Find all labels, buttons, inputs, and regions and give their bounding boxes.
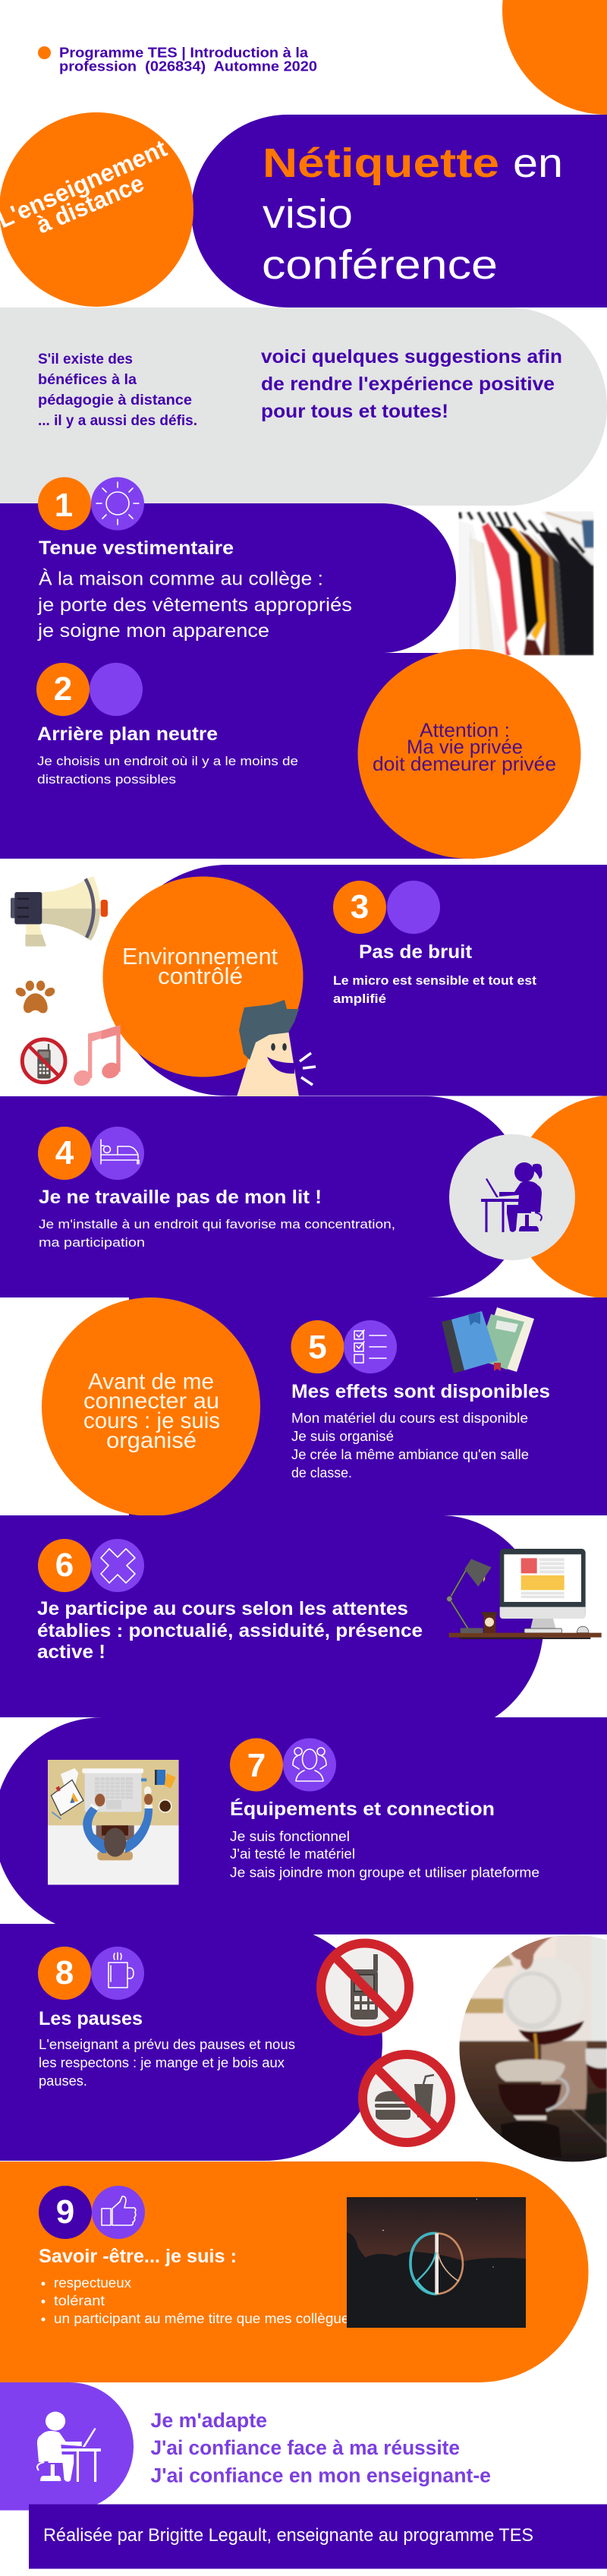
callout: attention: doit demeurer privée — [373, 752, 556, 775]
icon: sun — [91, 477, 144, 530]
section 1 text — [37, 568, 352, 642]
intro right text: pour tous et toutes! — [261, 401, 448, 422]
section 9 title: Savoir -être... je suis : — [39, 2246, 237, 2267]
panel: 7 équipements et connection — [0, 1717, 607, 1934]
panel: introduction — [0, 307, 607, 506]
icon: no food sign — [363, 2054, 451, 2142]
panel: 9 savoir-être — [0, 2161, 589, 2382]
intro left text: bénéfices à la — [38, 372, 137, 388]
section 3 text: Le micro est sensible et tout est — [333, 973, 536, 988]
section 7 title: Équipements et connection — [230, 1798, 495, 1820]
icon: megaphone — [11, 876, 108, 947]
intro right text: de rendre l'expérience positive — [261, 374, 555, 395]
icon: books — [442, 1307, 534, 1373]
icon: music notes — [71, 1025, 122, 1089]
title pill — [191, 115, 607, 307]
icon: no phone sign — [321, 1944, 409, 2032]
list of qualities: tolérant — [54, 2293, 105, 2308]
number 8: 8 — [55, 1954, 74, 1991]
section 2 text: Je choisis un endroit où il y a le moins de — [37, 754, 298, 768]
callout: avant de me connecter: connecter au — [83, 1389, 219, 1414]
photo: coffee being poured — [455, 1932, 607, 2162]
number 1: 1 — [55, 487, 73, 524]
icon: cross — [91, 1539, 144, 1592]
number 3 circle — [333, 881, 386, 934]
section 4 title: Je ne travaille pas de mon lit ! — [39, 1187, 322, 1208]
section 3 pill — [112, 865, 607, 1096]
section 5 text: Mon matériel du cours est disponible — [291, 1411, 528, 1426]
callout: avant de me connecter: organisé — [106, 1428, 197, 1453]
section 2 block — [0, 653, 474, 859]
callout: attention — [358, 649, 581, 859]
decorative corner circle — [502, 0, 607, 115]
panel: 6 participation — [0, 1515, 602, 1717]
section 6 title: établies : ponctualié, assiduité, présence — [37, 1620, 423, 1641]
callout: environnement contrôlé: contrôlé — [158, 963, 243, 989]
icon: no phone — [22, 1039, 65, 1083]
section 2 text — [37, 754, 298, 787]
section 7 pill — [0, 1717, 607, 1934]
icon: talking man — [237, 1000, 316, 1096]
callout: avant de me connecter: Avant de me — [88, 1370, 214, 1394]
title word Nétiquette: Nétiquette — [263, 140, 499, 186]
panel: 3 pas de bruit — [11, 865, 607, 1096]
grey circle with person icon — [449, 1134, 575, 1260]
section 5 text — [291, 1411, 529, 1480]
section 1 text: À la maison comme au collège : — [39, 568, 323, 589]
intro right text — [261, 346, 562, 422]
confidence text — [150, 2409, 491, 2487]
section 2 text: distractions possibles — [37, 772, 176, 787]
icon: checklist — [344, 1320, 397, 1373]
photo: clothes on hangers — [458, 511, 594, 655]
section 5 text: Je crée la même ambiance qu'en salle — [291, 1447, 529, 1462]
section 5 text: Je suis organisé — [291, 1429, 394, 1444]
icon: person at desk — [37, 2411, 101, 2482]
icon: bed — [91, 1127, 144, 1180]
confidence text: Je m'adapte — [150, 2409, 267, 2432]
number 8 circle — [38, 1947, 91, 2000]
section 1 pill — [0, 503, 456, 653]
number 5 circle — [291, 1320, 344, 1373]
section 3 title: Pas de bruit — [359, 941, 473, 963]
callout: avant de me connecter: cours : je suis — [83, 1408, 220, 1433]
footer band — [29, 2504, 607, 2569]
icon: paw — [14, 981, 56, 1013]
intro right text: voici quelques suggestions afin — [261, 346, 562, 367]
icon: mug — [91, 1947, 144, 2000]
panel: 8 les pauses — [0, 1924, 382, 2161]
course line 2: profession (026834) Automne 2020 — [59, 58, 317, 74]
callout: avant de me connecter — [42, 1297, 260, 1516]
badge line 2: à distance — [33, 169, 148, 238]
panel: 5 mes effets sont disponibles — [42, 1297, 607, 1516]
section 4 pill — [0, 1096, 526, 1297]
section 1 text: je soigne mon apparence — [37, 620, 269, 642]
section 4 text — [39, 1217, 395, 1250]
number 4: 4 — [55, 1134, 74, 1171]
section 7 text: Je sais joindre mon groupe et utiliser plateforme — [230, 1865, 539, 1880]
number 2 circle — [36, 663, 90, 716]
icon: desk with monitor and lamp — [447, 1549, 602, 1639]
panel: 4 je ne travaille pas de mon lit — [0, 1096, 607, 1299]
program header — [38, 44, 317, 74]
section 4 text: ma participation — [39, 1235, 145, 1250]
number 7 circle — [230, 1739, 283, 1792]
title word conférence: conférence — [262, 242, 498, 288]
title word visio: visio — [263, 191, 353, 237]
intro left text: pédagogie à distance — [38, 393, 192, 408]
number 2: 2 — [54, 670, 72, 708]
number 6: 6 — [55, 1547, 74, 1584]
section 4 text: Je m'installe à un endroit qui favorise ma concentration, — [39, 1217, 395, 1231]
section 8 title: Les pauses — [39, 2008, 143, 2029]
grey pill — [0, 307, 607, 506]
section 1 text: je porte des vêtements appropriés — [37, 594, 352, 616]
section 8 pill — [0, 1924, 382, 2161]
section 9 pill — [0, 2161, 589, 2382]
number 1 circle — [38, 477, 91, 530]
section 6 pill — [0, 1515, 543, 1717]
light purple half pill — [0, 2382, 134, 2510]
callout: environnement contrôlé — [103, 876, 304, 1077]
section 5 block — [129, 1297, 607, 1515]
right orange circle — [511, 1096, 607, 1299]
section 5 text: de classe. — [291, 1465, 352, 1480]
panel: confidence statements — [0, 2382, 491, 2510]
section 7 text: Je suis fonctionnel — [230, 1829, 350, 1844]
section 3 text — [333, 973, 536, 1006]
header bullet — [38, 46, 51, 59]
number 6 circle — [38, 1539, 91, 1592]
photo: peace sign light painting — [347, 2197, 526, 2328]
illustration: person at desk from above — [48, 1760, 179, 1885]
intro left text: ... il y a aussi des défis. — [38, 413, 197, 429]
panel: 2 arrière plan neutre — [0, 649, 581, 859]
intro left text: S'il existe des — [38, 352, 133, 367]
section 3 text: amplifié — [333, 992, 386, 1006]
course line 1: Programme TES | Introduction à la — [59, 44, 309, 61]
section 7 text — [230, 1829, 539, 1880]
section 6 title — [37, 1598, 423, 1663]
callout: attention: Ma vie privée — [407, 735, 523, 758]
badge circle — [0, 112, 193, 307]
intro left text — [38, 352, 197, 429]
section 5 title: Mes effets sont disponibles — [291, 1381, 550, 1402]
section 8 text: les respectons : je mange et je bois aux — [39, 2055, 285, 2070]
icon: thumb up — [92, 2186, 145, 2239]
callout: environnement contrôlé: Environnement — [122, 943, 278, 970]
section 8 text: L'enseignant a prévu des pauses et nous — [39, 2037, 295, 2052]
icon: three people — [283, 1739, 336, 1792]
footer — [29, 2504, 607, 2569]
section 7 text: J'ai testé le matériel — [230, 1846, 355, 1862]
panel: 1 tenue vestimentaire — [0, 477, 594, 655]
callout: attention: Attention : — [420, 718, 510, 741]
footer credit: Réalisée par Brigitte Legault, enseignante au programme TES — [43, 2525, 533, 2546]
list of qualities: respectueux — [54, 2275, 131, 2291]
list of qualities — [41, 2275, 357, 2326]
title word en: en — [513, 140, 563, 186]
section 1 title: Tenue vestimentaire — [39, 538, 234, 559]
badge: enseignement à distance — [0, 112, 193, 307]
section 8 text — [39, 2037, 295, 2089]
section 6 title: active ! — [37, 1641, 105, 1663]
empty icon circle — [90, 663, 143, 716]
section 8 text: pauses. — [39, 2073, 87, 2089]
title panel — [191, 115, 607, 307]
empty icon circle — [387, 881, 440, 934]
list of qualities: un participant au même titre que mes collègues — [54, 2311, 357, 2326]
section 2 title: Arrière plan neutre — [37, 724, 218, 745]
number 7: 7 — [247, 1747, 266, 1784]
number 5: 5 — [308, 1329, 327, 1366]
number 3: 3 — [351, 888, 369, 925]
number 9 circle — [39, 2186, 92, 2239]
section 6 title: Je participe au cours selon les attentes — [37, 1598, 408, 1619]
number 4 circle — [38, 1127, 91, 1180]
confidence text: J'ai confiance en mon enseignant-e — [150, 2464, 491, 2487]
confidence text: J'ai confiance face à ma réussite — [150, 2436, 460, 2459]
number 9: 9 — [56, 2193, 74, 2231]
